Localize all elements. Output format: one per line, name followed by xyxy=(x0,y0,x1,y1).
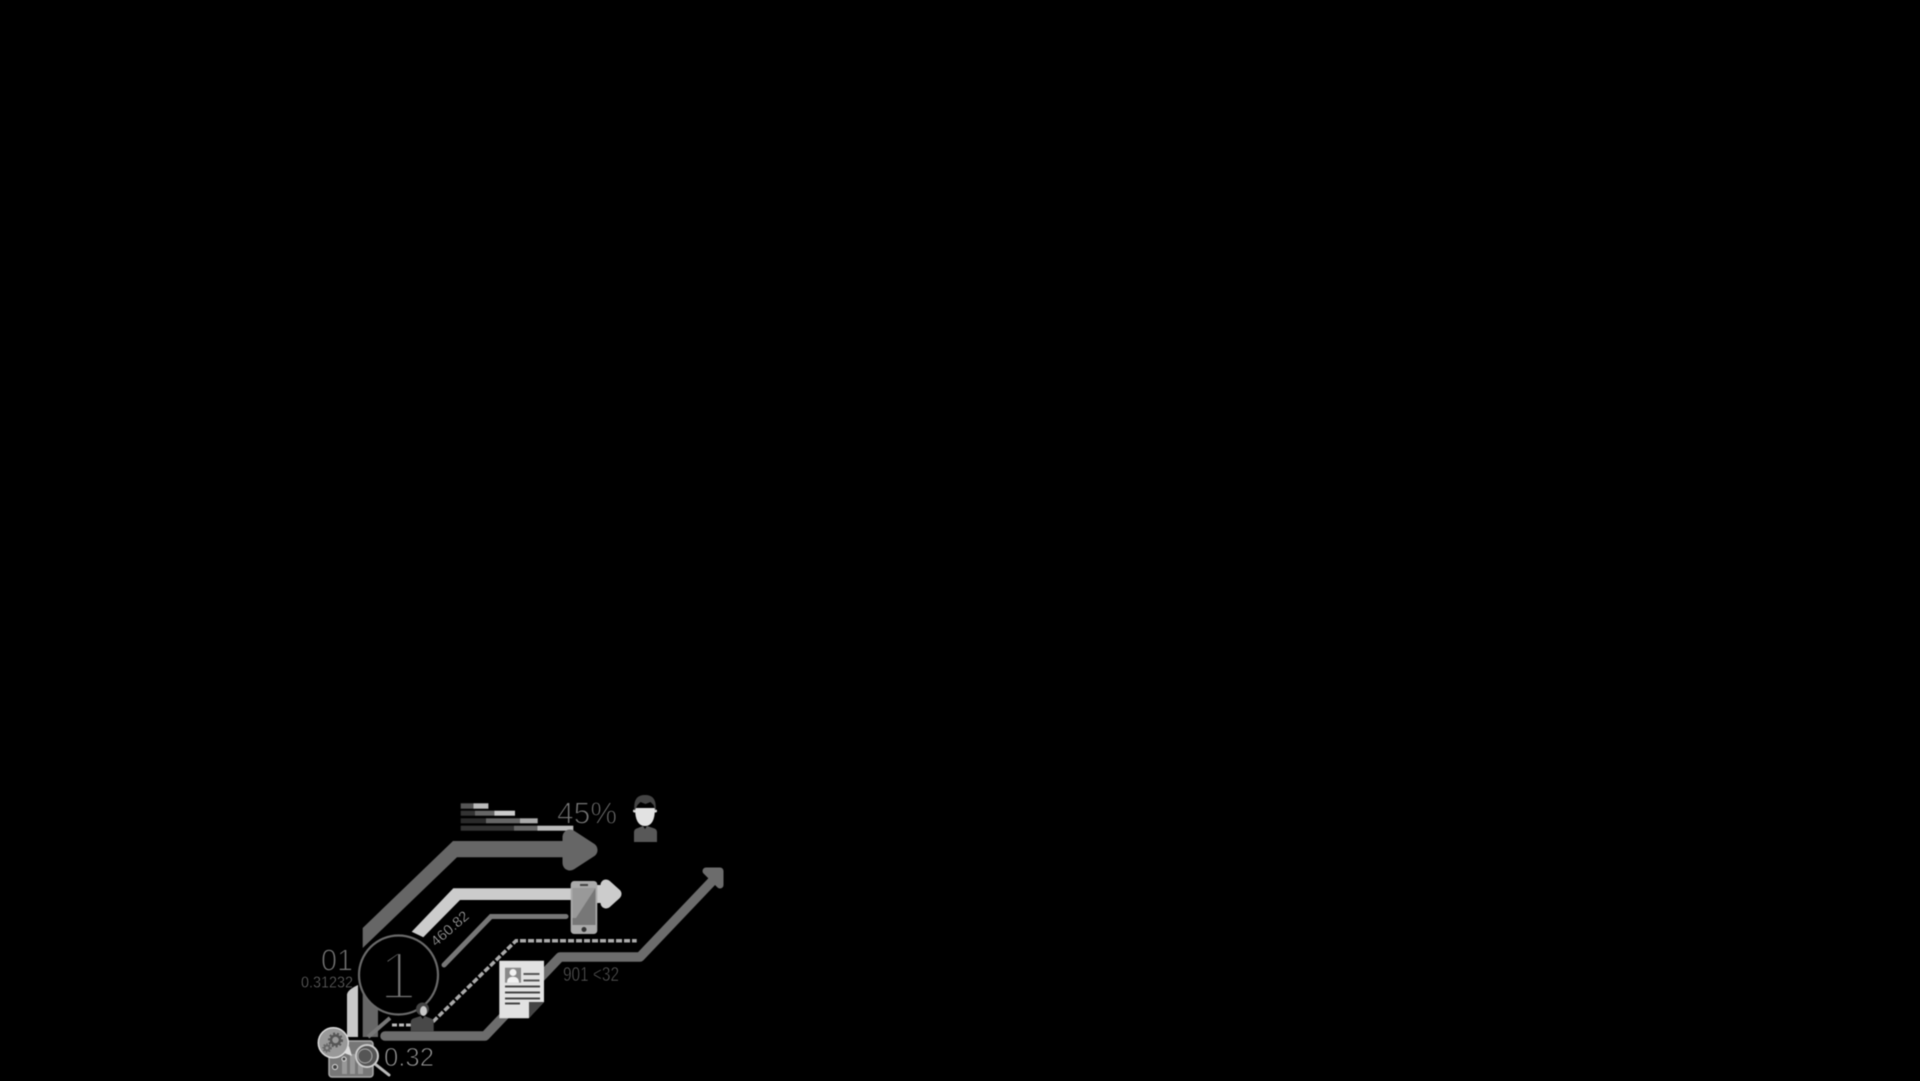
arrow: wide dark band xyxy=(363,837,590,948)
infographic cluster xyxy=(301,795,720,1077)
left vertical light band xyxy=(347,985,358,1037)
icon: analytics panel xyxy=(329,1041,373,1077)
arrow: rising band xyxy=(385,871,720,1036)
icon: smartphone xyxy=(571,881,597,934)
icon: woman xyxy=(411,1002,434,1031)
label: 0.31232: 0.31232 xyxy=(301,974,353,992)
label: 01: 01 xyxy=(321,942,353,978)
icon: magnifier xyxy=(356,1045,389,1075)
icon: man xyxy=(633,795,657,842)
left vertical dark band xyxy=(363,990,378,1037)
icon: document xyxy=(499,961,544,1018)
arrow: light band xyxy=(412,885,616,937)
line: medium band xyxy=(444,916,566,965)
line: dashed route xyxy=(433,941,637,1022)
label: 901 <32: 901 <32 xyxy=(563,964,619,986)
diagonal accent xyxy=(368,1018,390,1037)
circle with number 1: 1 xyxy=(379,938,417,1014)
label: 460.82: 460.82 xyxy=(428,908,473,950)
percentage: 45%: 45% xyxy=(557,796,617,830)
line: short dashes xyxy=(392,1024,411,1026)
bar chart: stacked bars xyxy=(461,803,573,831)
label: 0.32: 0.32 xyxy=(384,1042,434,1072)
circle with number 1 xyxy=(359,936,438,1014)
icon: gears speech bubble xyxy=(318,1028,352,1058)
